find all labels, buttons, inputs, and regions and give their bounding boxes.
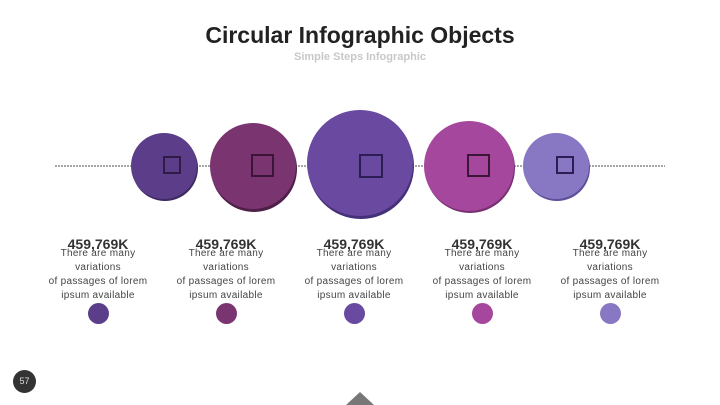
text col 3: 459,769K <box>324 236 384 252</box>
text col 4 <box>433 236 531 324</box>
text col 4: variations <box>459 262 505 273</box>
text col 4: There are many <box>445 248 519 259</box>
text col 2: There are many <box>189 248 263 259</box>
text col 3: of passages of lorem <box>305 276 403 287</box>
circle 5 <box>523 133 590 201</box>
text col 4: ipsum available <box>445 290 519 301</box>
text col 2: of passages of lorem <box>177 276 275 287</box>
text col 1: variations <box>75 262 121 273</box>
circle 3 <box>307 110 414 219</box>
text col 1: ipsum available <box>61 290 135 301</box>
text col 1: There are many <box>61 248 135 259</box>
text col 3 <box>305 236 403 324</box>
text col 2 <box>177 236 275 324</box>
circle 1 <box>131 133 198 201</box>
text col 1 <box>49 236 147 324</box>
text col 4: 459,769K <box>452 236 512 252</box>
text col 1: 459,769K <box>68 236 128 252</box>
subtitle: Simple Steps Infographic <box>294 51 426 63</box>
circle 2 <box>210 123 297 212</box>
text col 5: 459,769K <box>580 236 640 252</box>
page number: 57 <box>19 376 30 386</box>
text col 2: variations <box>203 262 249 273</box>
text col 3: There are many <box>317 248 391 259</box>
text col 1: of passages of lorem <box>49 276 147 287</box>
text col 3: variations <box>331 262 377 273</box>
text col 3: ipsum available <box>317 290 391 301</box>
text col 5: There are many <box>573 248 647 259</box>
text col 5: variations <box>587 262 633 273</box>
text col 5 <box>561 236 659 324</box>
bottom triangle <box>346 392 374 405</box>
page number <box>13 370 36 393</box>
text col 2: ipsum available <box>189 290 263 301</box>
text col 5: of passages of lorem <box>561 276 659 287</box>
text col 2: 459,769K <box>196 236 256 252</box>
circle 4 <box>424 121 515 213</box>
text col 4: of passages of lorem <box>433 276 531 287</box>
title: Circular Infographic Objects <box>205 22 515 48</box>
text col 5: ipsum available <box>573 290 647 301</box>
